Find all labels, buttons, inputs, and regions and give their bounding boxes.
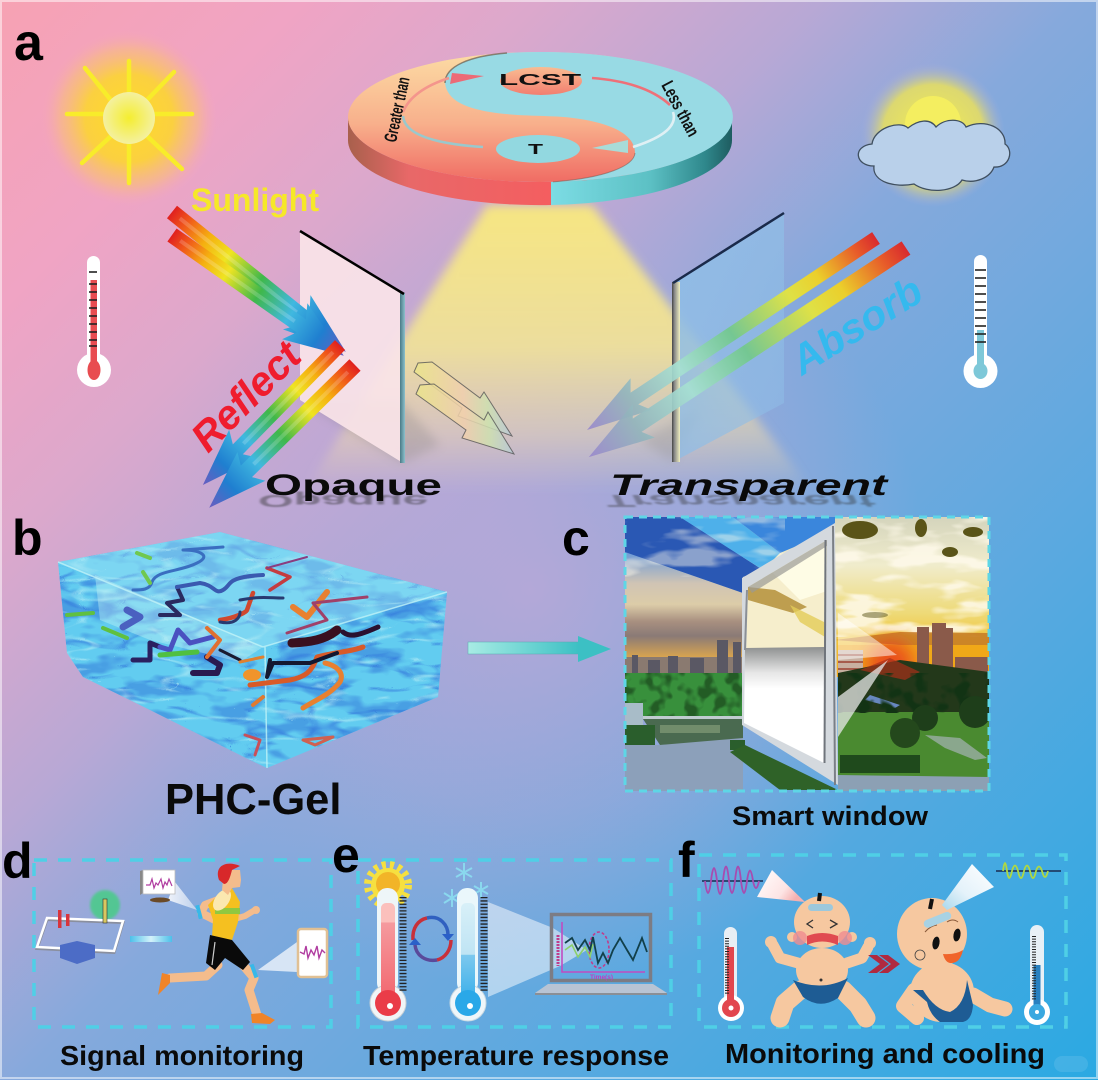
panel b: PHC-Gel block bbox=[12, 510, 450, 824]
white cone from baby one bbox=[757, 870, 805, 902]
opaque glass panel bbox=[300, 230, 440, 463]
dashed frame e bbox=[358, 860, 671, 1027]
phone with ECG signal bbox=[258, 929, 327, 977]
circuit with LED and gel bbox=[37, 890, 123, 964]
icon: runner bbox=[158, 864, 275, 1024]
red chevron arrow bbox=[868, 955, 900, 973]
icon: cold thermometer with snowflakes bbox=[444, 863, 587, 1021]
label Reflect: Reflect bbox=[182, 331, 311, 460]
label Signal monitoring: Signal monitoring bbox=[60, 1040, 304, 1071]
disc label Greater than: Greater than bbox=[380, 75, 414, 144]
rainbow arrow: transmitted upper bbox=[576, 222, 887, 446]
happy baby bbox=[897, 898, 1005, 1022]
small transition arrows bbox=[414, 362, 514, 454]
disc label LCST: LCST bbox=[499, 72, 582, 89]
panel d: signal monitoring bbox=[2, 833, 331, 1071]
panel label e: e bbox=[332, 827, 360, 883]
disc label T: T bbox=[528, 141, 543, 158]
rainbow arrow: reflected lower bbox=[195, 351, 369, 522]
panel label c: c bbox=[562, 510, 590, 566]
dashed frame f bbox=[699, 855, 1066, 1027]
icon: cool thermometer bbox=[964, 255, 998, 388]
arrow from gel to window bbox=[468, 636, 611, 662]
white cone from baby two with bandage bbox=[923, 864, 994, 929]
label Temperature response: Temperature response bbox=[363, 1040, 669, 1071]
rainbow arrow: incoming sunlight upper bbox=[158, 195, 360, 369]
disc label Less than: Less than bbox=[657, 77, 703, 140]
dashed frame d bbox=[34, 860, 331, 1027]
cyan connector bar bbox=[130, 936, 172, 942]
LCST yin-yang disc bbox=[348, 52, 733, 205]
rainbow arrow: reflected upper bbox=[189, 331, 354, 499]
panel f: monitoring and cooling bbox=[678, 832, 1066, 1069]
faint watermark pill bbox=[1054, 1056, 1088, 1072]
label Opaque with reflection: Opaque bbox=[258, 491, 428, 510]
panel label b: b bbox=[12, 510, 43, 566]
laptop with chart bbox=[535, 914, 667, 995]
label Sunlight: Sunlight bbox=[191, 182, 319, 218]
laptop with chart: Time(s) bbox=[590, 974, 613, 981]
polymer chains bbox=[67, 547, 378, 755]
panel c: smart window bbox=[562, 510, 991, 831]
thermometer blue bbox=[1024, 925, 1050, 1025]
label Transparent with reflection: Transparent bbox=[610, 469, 890, 502]
city photo scene bbox=[625, 517, 991, 791]
icon: hot thermometer with sun bbox=[368, 865, 408, 1021]
label Absorb: Absorb bbox=[782, 267, 931, 384]
label Transparent with reflection: Transparent bbox=[604, 491, 877, 510]
rainbow arrow: incoming sunlight lower bbox=[159, 217, 356, 374]
rainbow arrow: transmitted lower bbox=[578, 231, 917, 474]
yellow light cone bbox=[305, 205, 812, 490]
low-frequency green signal bbox=[996, 863, 1061, 878]
crying baby bbox=[765, 893, 876, 1018]
label Opaque with reflection bbox=[258, 469, 442, 510]
monitor with ECG signal bbox=[140, 870, 197, 910]
panel e: temperature response bbox=[332, 827, 671, 1071]
label Opaque with reflection: Opaque bbox=[265, 469, 442, 502]
icon: sun behind cloud bbox=[858, 63, 1010, 207]
window frame bbox=[742, 523, 838, 785]
high-frequency purple signal bbox=[702, 866, 763, 894]
hydrogel cube bbox=[50, 525, 450, 775]
thermometer red bbox=[718, 927, 744, 1021]
cycle arrows bbox=[409, 917, 454, 960]
panel label f: f bbox=[678, 832, 695, 888]
dashed frame bbox=[625, 517, 989, 791]
label Monitoring and cooling: Monitoring and cooling bbox=[725, 1038, 1045, 1069]
transparent glass panel bbox=[640, 213, 784, 462]
panel label a: a bbox=[14, 14, 44, 72]
label Transparent with reflection bbox=[604, 469, 890, 510]
panel label d: d bbox=[2, 833, 33, 889]
icon: hot thermometer bbox=[77, 256, 111, 387]
label PHC-Gel: PHC-Gel bbox=[165, 776, 341, 824]
label Smart window: Smart window bbox=[732, 801, 929, 831]
panel a: thermoresponsive switching bbox=[14, 14, 1010, 522]
icon: bright sun bbox=[41, 30, 217, 206]
